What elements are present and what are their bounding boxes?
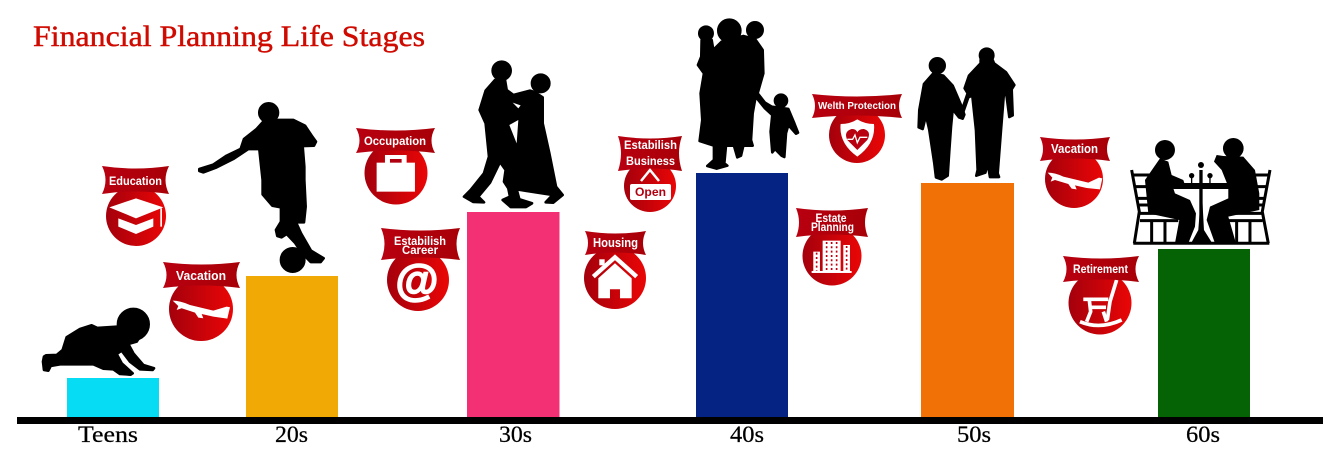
silhouette: elderly couple [919, 49, 1014, 179]
badge: Vacation [163, 262, 240, 341]
bar: Teens [67, 378, 159, 418]
silhouette: family [698, 20, 798, 169]
bar: 60s [1158, 249, 1250, 418]
badge: Retirement [1063, 256, 1139, 334]
silhouette: crawling baby [43, 309, 154, 375]
badge: Establish Career: Estabilish [394, 234, 446, 248]
bar: 50s [921, 183, 1014, 418]
badge: Establish Business [618, 136, 682, 212]
badge: Education: Education [109, 174, 162, 188]
label: 50s: 50s [957, 422, 991, 447]
badge: Vacation (50s): Vacation [1051, 142, 1098, 156]
badge: Occupation [356, 128, 435, 204]
icon: briefcase [377, 155, 415, 192]
icon: airplane [173, 301, 230, 319]
badge: Establish Business: Business [626, 154, 675, 168]
badge: Establish Career [381, 228, 460, 311]
badge: Housing [584, 231, 646, 309]
label: 60s: 60s [1186, 422, 1220, 447]
label: 40s: 40s [730, 422, 764, 447]
badge: Vacation (50s) [1040, 137, 1110, 208]
badge: Estate Planning: Estate [816, 213, 846, 225]
icon: airplane [1048, 173, 1102, 189]
bar: 40s [696, 173, 788, 418]
icon: house [593, 257, 637, 298]
bar: 20s [246, 276, 338, 418]
icon: shield with heart [840, 119, 874, 157]
badge: Housing: Housing [593, 236, 638, 250]
icon: rocking chair [1080, 280, 1122, 325]
badge: Education [102, 166, 169, 246]
label: 30s: 30s [499, 422, 532, 447]
label: 20s: 20s [275, 422, 308, 447]
badge: Estate Planning [796, 208, 868, 286]
badge: Wealth Protection: Welth Protection [818, 100, 896, 112]
icon: buildings [812, 241, 852, 273]
baseline axis [17, 417, 1323, 424]
badge: Vacation: Vacation [176, 268, 226, 283]
silhouette: dancing couple [464, 62, 563, 207]
icon: graduation cap [109, 198, 163, 234]
badge: Establish Business: Estabilish [624, 138, 677, 152]
silhouette: footballer [199, 103, 324, 272]
title: Financial Planning Life Stages [33, 20, 425, 53]
badge: Estate Planning: Planning [811, 222, 854, 234]
icon: at sign: @ [396, 256, 438, 305]
badge: Establish Career: Career [402, 243, 438, 257]
bar: 30s [467, 212, 560, 418]
silhouette: couple dining at table [1132, 138, 1270, 243]
badge: Retirement: Retirement [1073, 264, 1128, 276]
label: Teens: Teens [78, 422, 138, 447]
badge: Wealth Protection [812, 94, 902, 163]
badge: Occupation: Occupation [364, 134, 426, 148]
icon: open sign: Open [635, 185, 666, 199]
